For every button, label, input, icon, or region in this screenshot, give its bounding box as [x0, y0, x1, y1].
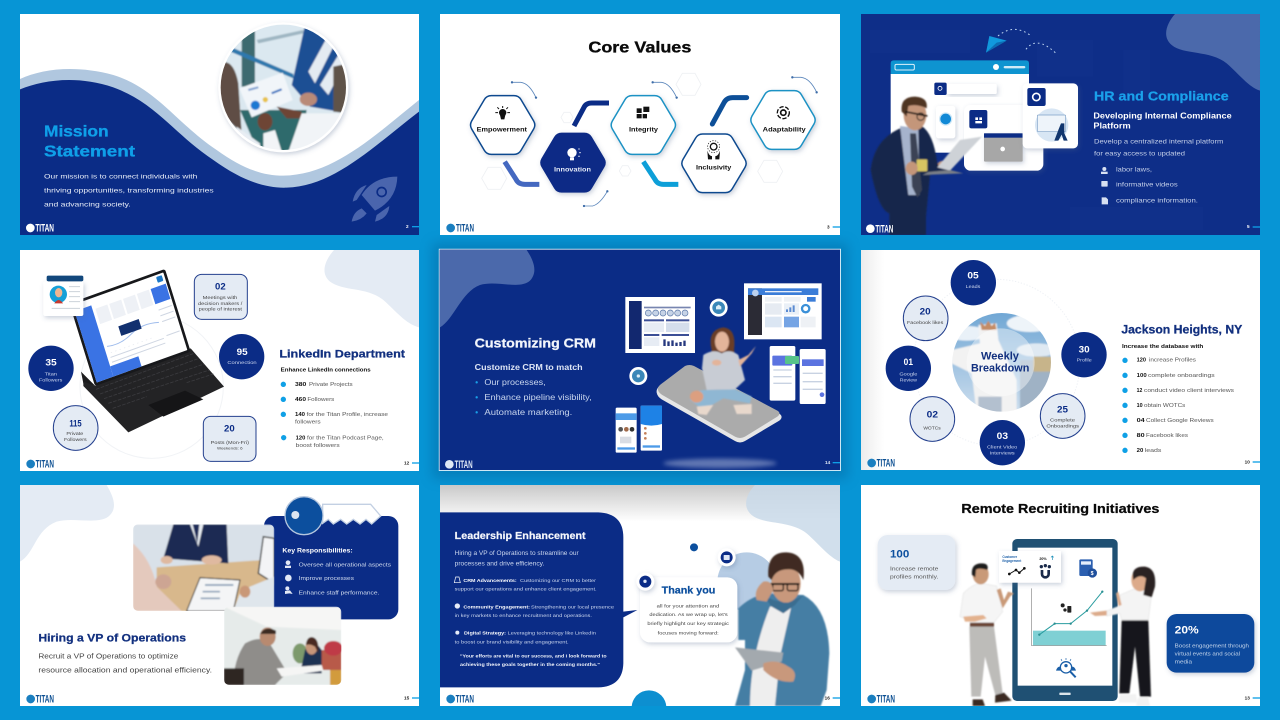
photo: woman sitting on phone — [690, 327, 756, 415]
heading: Mission — [44, 124, 109, 141]
tablet with keyboard illustration — [69, 269, 224, 432]
blob — [324, 250, 419, 327]
stat: 95 connection — [219, 334, 264, 379]
navy speech panel — [440, 512, 637, 687]
connectors — [505, 98, 747, 184]
subheading: Developing Internal Compliance — [1093, 110, 1232, 120]
thank you card: focuses moving forward: — [658, 630, 719, 636]
responsibilities card: Improve processes — [299, 576, 354, 582]
phone screens left — [616, 406, 662, 453]
subheading: Increase the database with — [1122, 344, 1203, 350]
responsibilities card: Enhance staff performance. — [299, 591, 380, 597]
page number: 16 — [825, 695, 830, 700]
compliance list: compliance information. — [1116, 198, 1198, 205]
heading: HR and Compliance — [1094, 90, 1229, 104]
logo — [26, 694, 54, 706]
stat: 02 meetings — [194, 274, 247, 319]
wave: light band — [20, 69, 419, 188]
targets list — [1122, 358, 1234, 454]
heading: Customizing CRM — [475, 336, 596, 350]
hexagon: empowerment: Empowerment — [477, 127, 528, 134]
page number: 3 — [827, 224, 830, 229]
customer engagement card — [999, 551, 1061, 583]
page number: 14 — [825, 460, 831, 465]
stat: 95 connection: Connection — [227, 360, 257, 366]
centre label: Weekly — [981, 351, 1019, 363]
page number: 10 — [1245, 459, 1250, 464]
mission text — [44, 174, 215, 208]
stat: 01 google review: 01 — [904, 357, 913, 367]
photo: statue of liberty — [947, 312, 1057, 415]
stat: 02 meetings: 02 — [215, 281, 226, 291]
item: CRM advancements: CRM Advancements: — [463, 578, 517, 584]
panel: mission statement slide — [20, 14, 419, 235]
customer engagement card: 20% — [1039, 557, 1047, 561]
logo — [26, 224, 54, 232]
subheading — [1094, 112, 1232, 128]
logo: TITAN — [35, 223, 54, 235]
stat card: 20 percent — [1167, 614, 1254, 673]
stat card: 100: Increase remote — [890, 567, 938, 573]
stat card: 20 percent: media — [1175, 660, 1192, 666]
stat card: 20 percent: virtual events and social — [1175, 652, 1240, 658]
stat card: 20 percent: 20% — [1175, 625, 1199, 637]
thank you card: briefly highlight our key strategic — [647, 621, 730, 627]
item: community engagement — [455, 603, 614, 619]
slide background — [440, 14, 840, 235]
backdrop circle — [80, 315, 223, 458]
page number — [825, 695, 840, 700]
centre label: Breakdown — [971, 363, 1029, 375]
blob — [20, 485, 114, 562]
panel: HR and compliance slide — [861, 14, 1260, 235]
stat: 25 complete onboardings: Complete — [1050, 418, 1075, 424]
targets list: 80 — [1137, 433, 1145, 439]
stat: 03 client video interviews: 03 — [997, 431, 1008, 441]
stat card: 100 — [878, 535, 955, 590]
icon: round badge left — [629, 367, 647, 385]
stat: 115 private followers: 115 — [69, 419, 82, 429]
item: digital strategy: Digital Strategy: — [464, 631, 506, 637]
slide background — [20, 485, 419, 706]
icon: key — [285, 497, 381, 535]
thank you card — [640, 577, 737, 642]
logo: TITAN — [36, 694, 54, 706]
blob — [440, 250, 534, 327]
description: resource allocation and operational efficiency. — [38, 665, 212, 674]
icon: people cog — [1061, 603, 1071, 613]
icon: calculator: $ — [1091, 571, 1094, 577]
LinkedIn targets list: 140 — [295, 412, 305, 418]
page number — [1245, 695, 1260, 700]
stat: 05 leads — [951, 260, 996, 305]
stat: 01 google review: Review — [900, 377, 918, 383]
customer engagement card: Engagement — [1002, 559, 1022, 563]
LinkedIn targets list: followers — [295, 420, 321, 426]
heading: LinkedIn Department — [279, 349, 405, 361]
page number — [827, 226, 840, 228]
logo: TITAN — [456, 694, 474, 706]
photo: man with tablet — [735, 552, 829, 706]
title: Core Values — [588, 40, 691, 57]
item: CRM advancements: Customizing our CRM to better — [520, 578, 596, 584]
logo: TITAN — [455, 459, 473, 471]
logo — [866, 224, 893, 233]
faint background hexagons — [482, 73, 783, 189]
mission text: and advancing society. — [44, 201, 131, 208]
logo — [445, 459, 473, 471]
thank you card: Thank you — [662, 585, 715, 596]
stat: 20 facebook likes: Facebook likes — [907, 320, 944, 326]
logo — [867, 458, 895, 470]
customer engagement card: Customer — [1002, 555, 1018, 559]
blob — [1166, 14, 1260, 91]
mission text: thriving opportunities, transforming industries — [44, 188, 215, 195]
photo: woman presenting — [1090, 567, 1155, 706]
stat card: 20 percent: Boost engagement through — [1175, 644, 1249, 650]
decorative circle — [717, 552, 776, 611]
page number — [404, 460, 419, 465]
targets list: Facebook likes — [1146, 433, 1188, 439]
icon: rocket — [352, 177, 397, 222]
logo — [26, 459, 54, 471]
icon: calculator — [1079, 559, 1097, 578]
panel: LinkedIn department slide — [20, 250, 419, 471]
page number — [1245, 459, 1260, 464]
compliance list — [1101, 166, 1198, 205]
stat: 20 posts — [203, 416, 256, 461]
line chart — [1032, 588, 1107, 646]
photo: businessman with laptop — [871, 97, 982, 235]
stat: 02 WOTCs — [910, 397, 955, 441]
stat: 30 profile — [1061, 332, 1107, 377]
LinkedIn targets list: 380 — [295, 382, 306, 388]
bullet list: Automate marketing. — [484, 407, 572, 417]
page number: 13 — [1245, 695, 1250, 700]
stat: 25 complete onboardings: 25 — [1057, 404, 1068, 414]
compliance list: informative videos — [1116, 181, 1178, 188]
stat: 25 complete onboardings — [1040, 394, 1085, 438]
page number — [1247, 225, 1260, 228]
description: Develop a centralized internal platform — [1094, 139, 1223, 146]
description — [1094, 139, 1223, 157]
stat: 03 client video interviews: Client Video — [987, 444, 1018, 450]
connector ring — [913, 279, 1080, 446]
stat: 02 WOTCs: 02 — [927, 409, 938, 419]
slide background — [861, 250, 1260, 470]
slide background — [20, 250, 419, 471]
profile card — [43, 276, 83, 316]
blob — [746, 485, 840, 562]
LinkedIn targets list: 460 — [295, 397, 306, 403]
stat: 02 WOTCs: WOTCs — [923, 425, 941, 431]
closing quote: "Your efforts are vital to our success, and I look forward to — [460, 653, 607, 659]
stat: 20 posts: 20 — [224, 423, 235, 433]
targets list: leads — [1145, 448, 1162, 454]
hexagon: adaptability — [751, 91, 815, 149]
page number: 15 — [404, 695, 410, 700]
stat: 05 leads: 05 — [967, 271, 979, 281]
slide background — [439, 249, 840, 470]
icon: paper plane — [986, 29, 1056, 53]
logo — [446, 694, 474, 706]
description: for easy access to updated — [1094, 150, 1186, 157]
stat: 01 google review: Google — [899, 371, 918, 377]
stat: 115 private followers: Private — [66, 431, 84, 437]
hexagon: innovation — [541, 133, 605, 192]
page number: 2 — [406, 224, 409, 229]
stat: 02 meetings: decision makers / — [198, 301, 243, 307]
LinkedIn targets list: for the Titan Podcast Page, — [307, 435, 384, 441]
logo — [446, 224, 474, 232]
stat: 01 google review — [886, 346, 931, 391]
responsibilities card: Oversee all operational aspects — [299, 563, 391, 569]
description — [38, 652, 212, 674]
heading: Jackson Heights, NY — [1121, 324, 1243, 337]
dot — [690, 543, 698, 551]
wave: navy area — [20, 80, 419, 235]
slide background — [20, 14, 419, 176]
hexagon: integrity — [611, 96, 675, 154]
subheading: Enhance LinkedIn connections — [281, 368, 371, 374]
stat card: 100: profiles monthly. — [890, 575, 939, 581]
targets list: 10 — [1137, 403, 1143, 409]
item: community engagement: in key markets to enhance recruitment and operations. — [455, 613, 592, 619]
hexagon: adaptability: Adaptability — [763, 127, 806, 134]
logo: TITAN — [875, 223, 893, 235]
targets list: 04 — [1137, 418, 1146, 424]
stat: 30 profile: 30 — [1079, 344, 1090, 354]
illustration: giant phone — [657, 365, 782, 442]
intro text: Hiring a VP of Operations to streamline our — [455, 551, 579, 557]
stat: 20 posts: Posts (Mon-Fri) — [211, 440, 249, 446]
thank you card: all for your attention and — [657, 603, 720, 609]
page number — [404, 695, 419, 700]
item: community engagement: Strengthening our local presence — [531, 604, 614, 610]
subheading: Customize CRM to match — [475, 363, 583, 372]
stat: 35 titan followers: Titan — [45, 371, 57, 377]
item: community engagement: Community Engagement: — [463, 604, 530, 610]
LinkedIn targets list: Followers — [307, 397, 335, 403]
LinkedIn targets list — [281, 382, 388, 449]
compliance list: labor laws, — [1116, 166, 1152, 173]
hexagon: integrity: Integrity — [629, 127, 658, 134]
LinkedIn targets list: 120 — [296, 435, 305, 441]
panel: weekly breakdown slide — [861, 250, 1260, 470]
tablet frame — [1012, 539, 1118, 701]
item: CRM advancements: support our operations and enhance client engagement. — [455, 587, 597, 593]
closing quote — [460, 653, 607, 668]
logo — [867, 694, 895, 706]
bullet list: Our processes, — [484, 377, 546, 387]
thin accent lines — [511, 76, 818, 207]
targets list: conduct video client interviews — [1144, 388, 1234, 394]
panel: remote recruiting slide — [861, 485, 1260, 706]
LinkedIn targets list: Private Projects — [309, 382, 353, 388]
targets list: 120 — [1137, 358, 1146, 364]
stat: 115 private followers — [53, 406, 98, 450]
targets list: 12 — [1137, 388, 1142, 394]
dashboard screen: left — [625, 297, 695, 353]
hexagon: empowerment — [470, 96, 535, 154]
targets list: complete onboardings — [1148, 373, 1215, 379]
slide background — [440, 485, 840, 706]
stat: 35 titan followers: 35 — [45, 357, 57, 367]
page number: 12 — [404, 460, 410, 465]
stat: 20 posts: Weekends: 6 — [217, 446, 243, 450]
item: CRM advancements — [454, 577, 597, 593]
page number — [825, 460, 840, 465]
stat: 35 titan followers — [28, 346, 74, 391]
stat: 03 client video interviews — [980, 420, 1025, 465]
centre slide glow — [432, 243, 848, 479]
photo: business team with report — [217, 22, 350, 157]
dashboard screen: right — [744, 283, 822, 339]
targets list: 20 — [1137, 448, 1143, 454]
LinkedIn targets list: boost followers — [296, 443, 340, 449]
heading: Statement — [44, 144, 136, 161]
item: digital strategy: Leveraging technology like LinkedIn — [508, 631, 596, 637]
thank you card: dedication. As we wrap up, let's — [649, 612, 728, 618]
bullet list: Enhance pipeline visibility, — [484, 392, 592, 402]
item: digital strategy — [455, 631, 596, 645]
mission text: Our mission is to connect individuals with — [44, 174, 198, 181]
closing quote: achieving these goals together in the coming months." — [460, 662, 600, 668]
stat: 02 meetings: people of interest — [199, 307, 243, 313]
logo: TITAN — [877, 694, 895, 706]
logo: TITAN — [877, 458, 895, 470]
responsibilities card — [264, 497, 398, 619]
stat: 30 profile: Profile — [1077, 358, 1092, 364]
stat: 35 titan followers: Followers — [39, 377, 63, 383]
photo: man presenting — [960, 563, 1014, 706]
LinkedIn targets list: for the Titan Profile, increase — [307, 412, 388, 418]
photo: contract meeting — [133, 524, 274, 611]
logo: TITAN — [456, 223, 474, 235]
stat: 115 private followers: Followers — [64, 437, 87, 443]
stat: 95 connection: 95 — [237, 347, 248, 357]
bottom circle — [632, 690, 666, 720]
phone screens right — [770, 346, 826, 404]
logo: TITAN — [36, 459, 54, 471]
description: Recruit a VP of Operations to optimize — [38, 652, 178, 661]
stat: 05 leads: Leads — [966, 284, 981, 290]
intro text — [455, 551, 579, 568]
photo: interview at table — [224, 607, 343, 685]
panel: hiring VP of operations slide — [20, 485, 419, 706]
app window illustration — [891, 60, 1078, 171]
stat: 20 facebook likes — [903, 296, 948, 341]
heading: Leadership Enhancement — [455, 531, 586, 542]
targets list: obtain WOTCs — [1144, 403, 1186, 409]
panel: leadership enhancement slide — [440, 485, 840, 720]
icon: store badge — [718, 548, 736, 566]
item: digital strategy: to boost our brand visibility and engagement. — [455, 639, 569, 645]
bullet list — [475, 377, 592, 417]
panel: customizing CRM slide — [439, 249, 840, 471]
title: Remote Recruiting Initiatives — [961, 502, 1159, 516]
stat: 03 client video interviews: Interviews — [990, 450, 1015, 456]
faint office texture — [870, 30, 1203, 230]
intro text: processes and drive efficiency. — [455, 562, 545, 568]
icon: round badge top — [710, 299, 728, 317]
stat: 20 facebook likes: 20 — [920, 307, 931, 317]
hexagon: inclusivity — [682, 134, 746, 193]
icon: recruiting search — [1056, 658, 1076, 677]
panel: core values slide — [440, 14, 840, 235]
slide background — [861, 485, 1260, 706]
stat: 25 complete onboardings: Onboardings — [1046, 424, 1080, 430]
centre label — [971, 351, 1029, 375]
page number: 5 — [1247, 224, 1250, 229]
targets list: Collect Google Reviews — [1146, 418, 1214, 424]
heading: Hiring a VP of Operations — [38, 633, 186, 645]
stat: 02 meetings: Meetings with — [203, 295, 238, 301]
glow under phone — [663, 459, 777, 468]
hexagon: inclusivity: Inclusivity — [696, 164, 732, 171]
subheading: Platform — [1093, 121, 1131, 131]
stat card: 100: 100 — [890, 548, 909, 560]
hexagon: innovation: Innovation — [554, 167, 591, 174]
icon: search badge — [636, 573, 654, 591]
page number — [406, 225, 419, 228]
slide background — [861, 14, 1260, 235]
targets list: increase Profiles — [1149, 358, 1196, 364]
heading — [44, 124, 135, 157]
responsibilities card: Key Responsibilities: — [282, 547, 353, 554]
targets list: 100 — [1137, 373, 1147, 379]
